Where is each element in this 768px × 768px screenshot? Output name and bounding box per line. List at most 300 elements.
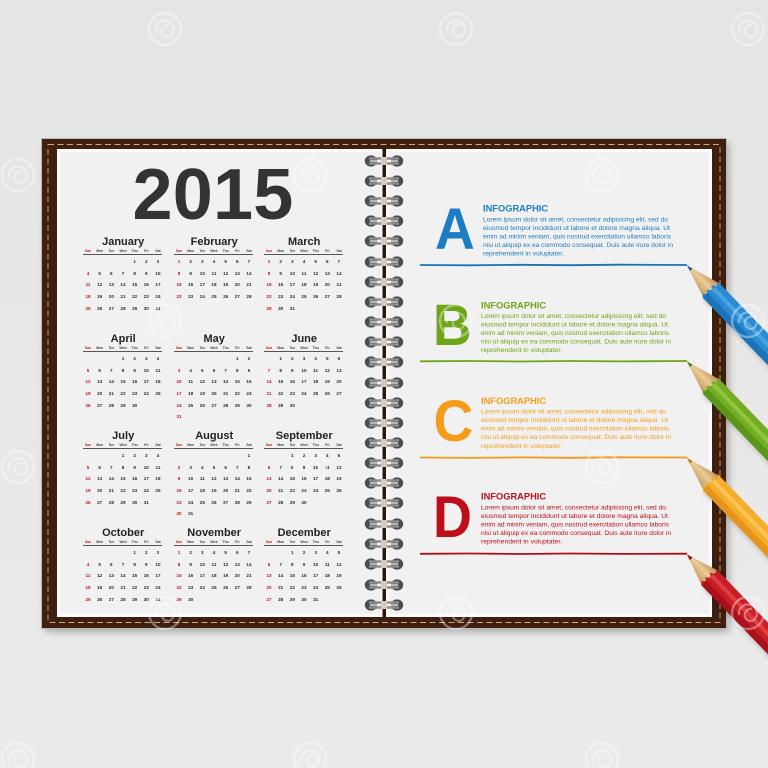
calendar: August: 16 <box>176 488 182 493</box>
calendar: March <box>264 236 343 311</box>
calendar: January: 22 <box>132 294 137 299</box>
calendar: January: 6 <box>110 271 113 276</box>
pencil line: green <box>420 360 687 362</box>
block A: blue infographic text: A <box>435 197 475 261</box>
calendar: January: 25 <box>85 306 91 311</box>
calendar: December: December <box>278 527 331 539</box>
calendar: September: 14 <box>278 476 283 481</box>
calendar: August: 4 <box>201 465 204 470</box>
calendar: June: June <box>291 333 317 345</box>
calendar: December: 1 <box>291 550 294 555</box>
calendar: September <box>264 430 343 505</box>
calendar: April: 14 <box>109 379 114 384</box>
calendar: April: 26 <box>85 403 91 408</box>
calendar: August: 29 <box>246 500 252 505</box>
calendar: July: Sun <box>85 443 91 447</box>
block D: red infographic text: Lorem ipsum dolor sit amet, consectetur adipisicing elit, sed do <box>481 504 666 511</box>
pencil line: orange <box>420 456 687 459</box>
calendar: July: 2 <box>133 453 136 458</box>
calendar: December: 21 <box>278 585 283 590</box>
calendar: June: 7 <box>268 368 270 373</box>
calendar: November <box>174 527 253 602</box>
block D: red infographic text: nisi ut aliquip ex ea commodo consequat. Duis aute irure dolor in <box>481 530 671 537</box>
calendar: February: Thu <box>223 249 229 253</box>
calendar: August: Thu <box>223 443 229 447</box>
calendar: June: 10 <box>301 368 307 373</box>
calendar: January: 24 <box>155 294 161 299</box>
calendar: October: 17 <box>155 573 161 578</box>
calendar: November: 14 <box>246 562 252 567</box>
calendar: January: Fri <box>144 249 148 253</box>
calendar: June: Mon <box>277 346 284 350</box>
calendar: March: 11 <box>302 271 306 276</box>
calendar: February: 13 <box>235 271 240 276</box>
calendar: March: Sat <box>336 249 342 253</box>
calendar: November: Thu <box>223 540 229 544</box>
calendar: March: 12 <box>313 271 318 276</box>
block A: blue infographic text: Lorem ipsum dolor sit amet, consectetur adipisicing elit, sed do <box>483 216 668 223</box>
calendar: May: 26 <box>200 403 205 408</box>
calendar: June: 30 <box>290 403 295 408</box>
calendar: October: 26 <box>97 597 102 602</box>
calendar: April: 15 <box>120 379 126 384</box>
calendar: January: 31 <box>155 306 161 311</box>
calendar: January: 8 <box>133 271 136 276</box>
calendar: December: 31 <box>313 597 318 602</box>
calendar: December: 25 <box>325 585 330 590</box>
calendar: May: 29 <box>235 403 240 408</box>
calendar: August: Wed <box>210 443 218 447</box>
calendar: June: 9 <box>291 368 294 373</box>
pencil: orange <box>678 450 768 582</box>
block B: green infographic text: B <box>433 293 472 357</box>
calendar: November: Tue <box>199 540 205 544</box>
calendar: March: 25 <box>301 294 307 299</box>
calendar: September: September <box>276 430 333 442</box>
calendar: February: 4 <box>213 259 215 264</box>
calendar: March: 30 <box>278 306 283 311</box>
block D: red infographic text: eiusmod tempor incididunt ut labore et dolore magna aliqua. Ut <box>481 513 668 520</box>
calendar: July: 27 <box>97 500 102 505</box>
calendar: January: Thu <box>132 249 138 253</box>
calendar: June: 28 <box>266 403 272 408</box>
calendar: February: Mon <box>187 249 194 253</box>
calendar: December: 29 <box>290 597 295 602</box>
calendar: October: 20 <box>109 585 114 590</box>
calendar: July: Wed <box>119 443 127 447</box>
calendar: July: 22 <box>120 488 126 493</box>
calendar: November: 19 <box>223 573 228 578</box>
calendar: June: Thu <box>313 346 319 350</box>
block D: red infographic text: reprehenderit in voluptater. <box>481 539 562 546</box>
calendar: September: 4 <box>326 453 329 458</box>
calendar: December: 6 <box>268 562 270 567</box>
calendar: January: 13 <box>109 282 114 287</box>
pencil: green <box>678 354 768 486</box>
block A: blue infographic text <box>435 197 673 261</box>
calendar: February: 10 <box>200 271 205 276</box>
calendar: June: 19 <box>325 379 330 384</box>
spiral binding <box>365 155 403 611</box>
calendar: September: 2 <box>303 453 305 458</box>
calendar: October: 9 <box>145 562 148 567</box>
calendar: April: 4 <box>157 356 159 361</box>
block A: blue infographic text: INFOGRAPHIC <box>483 204 548 214</box>
calendar: June: 24 <box>301 391 307 396</box>
calendar: March: 2 <box>279 259 282 264</box>
calendar: February: 5 <box>224 259 227 264</box>
calendar: May: 19 <box>200 391 205 396</box>
calendar: September: Sat <box>336 443 342 447</box>
calendar: October: 27 <box>109 597 114 602</box>
calendar: January: Mon <box>96 249 103 253</box>
block D: red infographic text: enim ad minim veniam, quis nostrud exercitation ullamco laboris <box>481 522 670 528</box>
calendar: August: 13 <box>223 476 228 481</box>
calendar: March: 15 <box>266 282 272 287</box>
calendar: December: 18 <box>325 573 330 578</box>
calendar: April: Tue <box>108 346 114 350</box>
calendar: November: November <box>187 527 241 539</box>
calendar: December: 23 <box>301 585 307 590</box>
calendar: March: Sun <box>266 249 272 253</box>
calendar: June: 11 <box>313 368 318 373</box>
calendar: April: 27 <box>97 403 102 408</box>
calendar: October: Mon <box>96 540 103 544</box>
calendar: January: 12 <box>97 282 102 287</box>
block B: green infographic text: INFOGRAPHIC <box>481 300 546 310</box>
calendar: March: 1 <box>268 259 270 264</box>
calendar: July: Tue <box>108 443 114 447</box>
calendar: March: Mon <box>277 249 284 253</box>
calendar: September: Mon <box>277 443 284 447</box>
calendar: October: 5 <box>98 562 101 567</box>
calendar: June: 20 <box>336 379 342 384</box>
calendar: August: 19 <box>211 488 217 493</box>
calendar: March: March <box>288 236 320 248</box>
calendar: August: 14 <box>235 476 240 481</box>
calendar: April: 12 <box>85 379 91 384</box>
calendar: February: 26 <box>223 294 228 299</box>
calendar: April: 22 <box>120 391 126 396</box>
calendar: May: 20 <box>211 391 217 396</box>
calendar: October: 1 <box>133 550 136 555</box>
calendar: May: 22 <box>235 391 240 396</box>
calendar: April: Sun <box>85 346 91 350</box>
calendar: June: 23 <box>290 391 295 396</box>
calendar: January: 10 <box>155 271 161 276</box>
calendar: March: Tue <box>289 249 295 253</box>
calendar: August: 10 <box>188 476 193 481</box>
calendar: August: Sun <box>176 443 182 447</box>
calendar: October: 23 <box>144 585 149 590</box>
block A: blue infographic text: reprehenderit in voluptater. <box>483 251 564 258</box>
calendar: January: 21 <box>120 294 126 299</box>
calendar: April <box>83 333 162 408</box>
calendar: September: 28 <box>278 500 283 505</box>
calendar: March: Thu <box>313 249 319 253</box>
calendar: December: 22 <box>290 585 295 590</box>
calendar: October: 21 <box>120 585 126 590</box>
calendar: February: 20 <box>235 282 240 287</box>
calendar: February: 19 <box>223 282 228 287</box>
calendar: December: 17 <box>313 573 318 578</box>
calendar: June: 16 <box>290 379 295 384</box>
block C: orange infographic text: enim ad minim veniam, quis nostrud exercitation ullamco laboris <box>481 426 670 433</box>
calendar: February: 15 <box>176 282 182 287</box>
calendar: November: 21 <box>246 573 252 578</box>
calendar: December: 24 <box>313 585 318 590</box>
block C: orange infographic text: eiusmod tempor incididunt ut labore et dolore magna aliqua. Ut <box>481 417 668 424</box>
calendar: May: Fri <box>235 346 239 350</box>
calendar: August: 17 <box>188 488 193 493</box>
calendar: December: 20 <box>266 585 272 590</box>
calendar: October: 28 <box>120 597 126 602</box>
block C: orange infographic text: reprehenderit in voluptater. <box>481 443 562 450</box>
calendar: August: 3 <box>189 465 192 470</box>
calendar: December: 4 <box>326 550 329 555</box>
pencil: blue <box>678 258 768 390</box>
calendar: October: Sat <box>155 540 161 544</box>
calendar: September: 17 <box>313 476 318 481</box>
calendar: May: Sat <box>246 346 252 350</box>
calendar: July: 12 <box>85 476 91 481</box>
calendar: June: 2 <box>291 356 294 361</box>
calendar: February: 6 <box>236 259 239 264</box>
calendar: October: 3 <box>157 550 159 555</box>
calendar: September: 20 <box>266 488 272 493</box>
calendar: January: 29 <box>132 306 137 311</box>
calendar: April: 18 <box>155 379 161 384</box>
calendar: October <box>83 527 162 602</box>
calendar: April: 17 <box>144 379 149 384</box>
calendar: April: 9 <box>133 368 136 373</box>
calendar: November: 27 <box>235 585 240 590</box>
calendar: January: Wed <box>119 249 127 253</box>
calendar: April: 23 <box>132 391 137 396</box>
calendar: July: 19 <box>85 488 91 493</box>
calendar: May: 3 <box>178 368 180 373</box>
calendar: November: 4 <box>213 550 215 555</box>
calendar: May: 6 <box>213 368 215 373</box>
calendar: February: 25 <box>211 294 217 299</box>
calendar: August: 24 <box>188 500 193 505</box>
block B: green infographic text: nisi ut aliquip ex ea commodo consequat. Duis aute irure dolor in <box>481 339 671 346</box>
calendar: January: 2 <box>145 259 148 264</box>
calendar: December: 7 <box>279 562 282 567</box>
calendar: December: 26 <box>336 585 342 590</box>
calendar: September: 23 <box>301 488 307 493</box>
calendar: December: Sun <box>266 540 272 544</box>
calendar: April: 16 <box>132 379 137 384</box>
calendar: January: 14 <box>120 282 126 287</box>
calendar: April: 25 <box>155 391 161 396</box>
calendar: December: 27 <box>266 597 272 602</box>
calendar: November: Sun <box>176 540 182 544</box>
calendar: November: 1 <box>178 550 180 555</box>
calendar: May: Sun <box>176 346 182 350</box>
calendar: June: 25 <box>313 391 318 396</box>
calendar: August: 5 <box>213 465 215 470</box>
calendar: December: Thu <box>313 540 319 544</box>
calendar: July: 25 <box>155 488 161 493</box>
calendar: May <box>174 333 253 419</box>
notebook cover <box>42 139 726 628</box>
calendar: May: 10 <box>176 379 182 384</box>
calendar: November: 12 <box>223 562 228 567</box>
block B: green infographic text <box>433 293 671 357</box>
calendar: February: 1 <box>178 259 180 264</box>
calendar: August: 26 <box>211 500 217 505</box>
calendar: March: 26 <box>313 294 318 299</box>
calendar: October: 24 <box>155 585 161 590</box>
calendar: August: 12 <box>211 476 217 481</box>
calendar: November: 17 <box>200 573 205 578</box>
pencil line: red <box>420 552 687 555</box>
calendar: July: 20 <box>97 488 102 493</box>
panel: right page <box>386 149 712 617</box>
calendar: November: 10 <box>200 562 205 567</box>
calendar: January: Sat <box>155 249 161 253</box>
calendar: April: 8 <box>122 368 124 373</box>
calendar: February: Sun <box>176 249 182 253</box>
calendar: February: 12 <box>223 271 228 276</box>
calendar: October: 22 <box>132 585 137 590</box>
calendar: December: 13 <box>266 573 272 578</box>
calendar: December: Tue <box>289 540 295 544</box>
calendar: March: 14 <box>336 271 342 276</box>
calendar: March: 6 <box>326 259 329 264</box>
calendar: August: 28 <box>235 500 240 505</box>
calendar: June: 17 <box>301 379 307 384</box>
calendar: October: 8 <box>133 562 136 567</box>
calendar: May: 30 <box>246 403 252 408</box>
calendar: July: 5 <box>87 465 89 470</box>
calendar: November: 7 <box>248 550 250 555</box>
calendar: May: 14 <box>223 379 228 384</box>
calendar: July: Thu <box>132 443 138 447</box>
calendar: September: 19 <box>336 476 342 481</box>
calendar: February: 7 <box>248 259 250 264</box>
calendar: August: 31 <box>188 511 193 516</box>
calendar: September: Wed <box>300 443 308 447</box>
calendar: March: 18 <box>301 282 307 287</box>
calendar: February: Sat <box>246 249 252 253</box>
calendar: January: 1 <box>133 259 136 264</box>
calendar: August: 11 <box>200 476 205 481</box>
calendar: April: Mon <box>96 346 103 350</box>
calendar: April: April <box>111 333 136 345</box>
calendar: February: 8 <box>178 271 180 276</box>
calendar: March: 20 <box>325 282 330 287</box>
calendar: August: Tue <box>199 443 205 447</box>
calendar: December <box>264 527 343 602</box>
calendar: December: 30 <box>301 597 307 602</box>
calendar: July: 13 <box>97 476 102 481</box>
calendar: January: 11 <box>86 282 90 287</box>
calendar: August: 15 <box>246 476 252 481</box>
calendar: October: 2 <box>145 550 148 555</box>
calendar: February: 9 <box>189 271 192 276</box>
calendar: November: 3 <box>201 550 204 555</box>
calendar: September: 8 <box>291 465 294 470</box>
calendar: May: 15 <box>235 379 240 384</box>
calendar: May: 28 <box>223 403 228 408</box>
calendar: September: 16 <box>301 476 307 481</box>
calendar: March: 23 <box>278 294 283 299</box>
calendar: September: 26 <box>336 488 342 493</box>
calendar: April: Fri <box>144 346 148 350</box>
calendar: November: 8 <box>178 562 180 567</box>
calendar: December: 5 <box>338 550 340 555</box>
calendar: May: Mon <box>187 346 194 350</box>
calendar: July: Mon <box>96 443 103 447</box>
calendar: November: 13 <box>235 562 240 567</box>
calendar: December: Fri <box>325 540 329 544</box>
calendar: October: 25 <box>85 597 91 602</box>
calendar: November: 26 <box>223 585 228 590</box>
calendar: November: 23 <box>188 585 193 590</box>
calendar: December: Wed <box>300 540 308 544</box>
block C: orange infographic text: C <box>434 389 473 453</box>
calendar: May: 2 <box>248 356 250 361</box>
calendar: June: Tue <box>289 346 295 350</box>
calendar: February: 28 <box>246 294 252 299</box>
calendar: February: 2 <box>189 259 192 264</box>
block C: orange infographic text <box>434 389 671 453</box>
calendar: May: 8 <box>236 368 239 373</box>
calendar: September: 13 <box>266 476 272 481</box>
calendar: August: 6 <box>224 465 227 470</box>
calendar: August: 21 <box>235 488 240 493</box>
calendar: August: August <box>195 430 233 442</box>
calendar: February: 21 <box>246 282 252 287</box>
calendar: April: Sat <box>155 346 161 350</box>
calendar: April: 28 <box>109 403 114 408</box>
calendar: January: 18 <box>85 294 91 299</box>
calendar: December: Mon <box>277 540 284 544</box>
calendar: March: 28 <box>336 294 342 299</box>
calendar: January: 26 <box>97 306 102 311</box>
calendar: April: 6 <box>98 368 101 373</box>
calendar: December: 16 <box>301 573 307 578</box>
block B: green infographic text: enim ad minim veniam, quis nostrud exercitation ullamco laboris <box>481 330 670 337</box>
calendar: November: 30 <box>188 597 193 602</box>
calendar: March: 3 <box>291 259 294 264</box>
calendar: July: 8 <box>122 465 124 470</box>
calendar: June: 5 <box>326 356 329 361</box>
calendar: August: 2 <box>178 465 180 470</box>
calendar: April: 5 <box>87 368 89 373</box>
calendar: January: 15 <box>132 282 137 287</box>
calendar: July: 16 <box>132 476 137 481</box>
calendar: January: January <box>102 236 144 248</box>
calendar: October: 13 <box>109 573 114 578</box>
calendar: January: Tue <box>108 249 114 253</box>
calendar: May: 27 <box>211 403 217 408</box>
calendar: February: 14 <box>246 271 252 276</box>
calendar: November: Sat <box>246 540 252 544</box>
block B: green infographic text: Lorem ipsum dolor sit amet, consectetur adipisicing elit, sed do <box>481 313 666 320</box>
calendar: May: 17 <box>176 391 182 396</box>
calendar: February: Tue <box>199 249 205 253</box>
spine <box>382 148 386 618</box>
calendar: August <box>174 430 253 516</box>
calendar: May: 18 <box>188 391 193 396</box>
calendar: December: 15 <box>290 573 295 578</box>
calendar: July: 9 <box>133 465 136 470</box>
calendar: January: 27 <box>109 306 114 311</box>
calendar: August: 18 <box>200 488 205 493</box>
